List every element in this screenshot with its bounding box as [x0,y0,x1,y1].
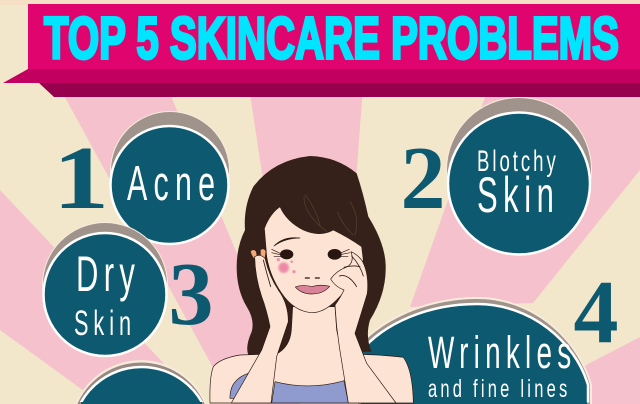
circle 5 partial [75,360,207,404]
circle 3: dry skin [42,222,168,356]
finger lines [263,256,363,287]
sublabel: Skin [74,305,131,343]
top [230,373,348,403]
label: Acne [127,156,215,211]
title banner [0,0,640,97]
label: Dry [76,245,135,302]
number 2: 2 [400,129,446,228]
right arm and hand [331,252,396,403]
number 1: 1 [53,128,109,228]
body [210,307,413,403]
spots [277,258,296,273]
sublabel: Skin [477,166,554,223]
nose [305,276,319,280]
hair [237,156,386,355]
circle 2: blotchy skin [446,97,592,254]
lashes [272,249,350,257]
circle 4 background [355,297,592,404]
wrinkles sublabel: and fine lines [428,376,567,403]
number 3: 3 [168,245,214,344]
fingertips [251,249,266,259]
blush [277,261,290,274]
wrinkles label: Wrinkles [428,327,571,378]
bangs strands [304,195,357,235]
label: Blotchy [477,145,556,178]
number 4: 4 [574,263,618,362]
face [264,207,363,313]
left arm and hand [231,255,288,403]
girl illustration [210,156,413,403]
eyes [280,249,342,260]
circle 1: acne [110,111,230,244]
eyebrow [274,238,300,246]
lips [295,285,330,294]
